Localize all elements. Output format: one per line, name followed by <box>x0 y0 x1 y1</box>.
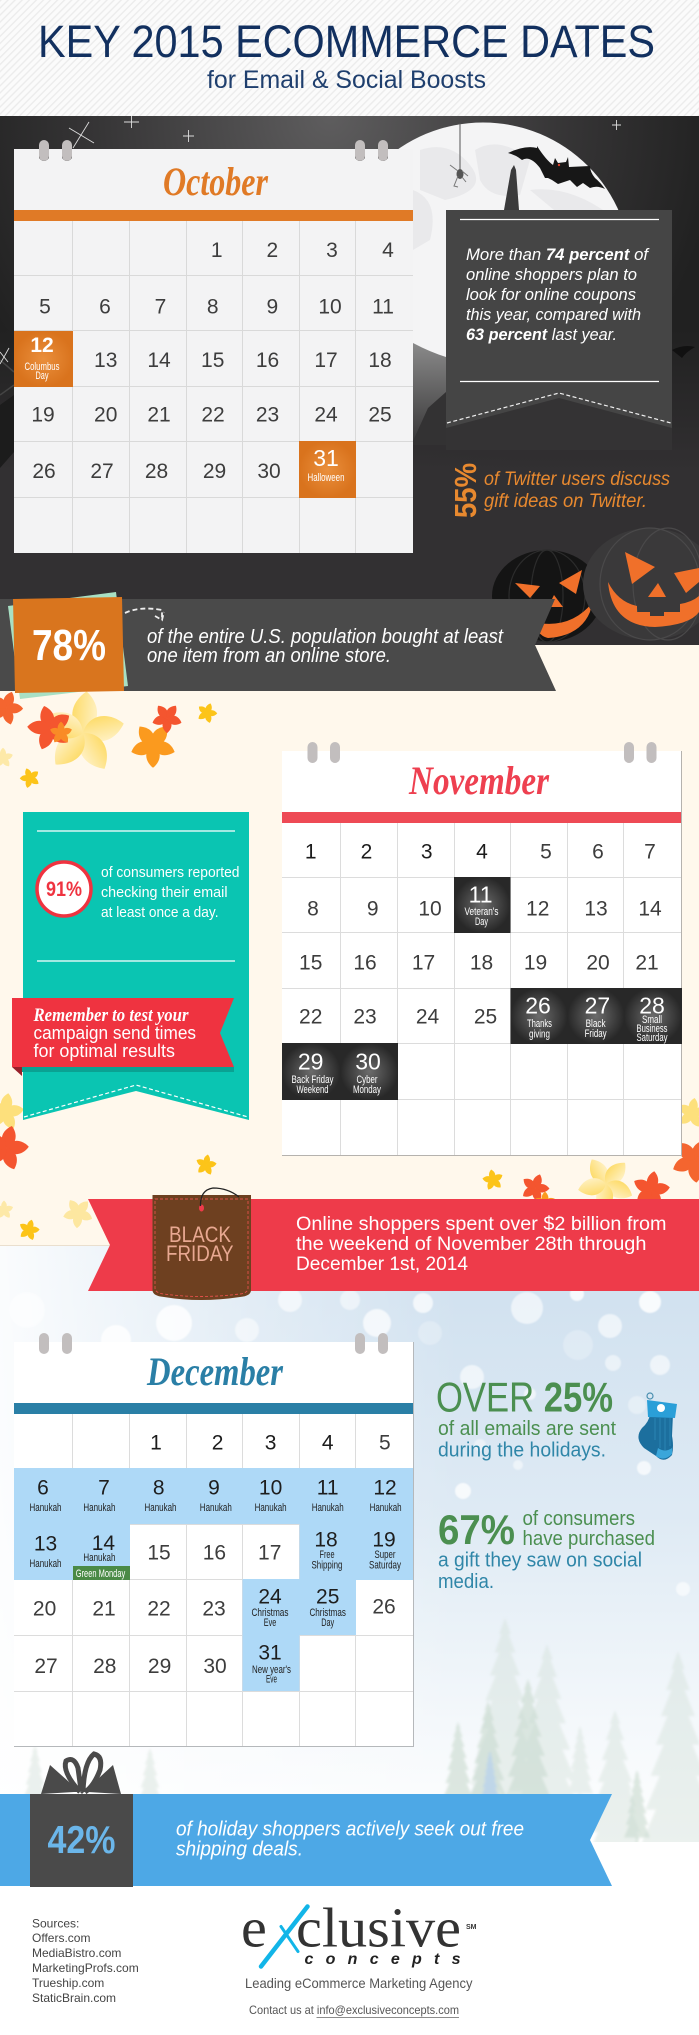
binder rings <box>39 140 388 161</box>
stat: 67% gift on social media: media. <box>438 1571 494 1593</box>
dates: 18 <box>470 952 493 974</box>
dates: 3 <box>265 1432 276 1454</box>
holiday labels: 24 <box>258 1586 282 1608</box>
logo: Exclusive Concepts: c o n c e p t s <box>304 1951 461 1968</box>
spider <box>450 123 468 187</box>
highlight: Black Friday: 27 <box>585 992 610 1018</box>
highlight: Halloween: Halloween <box>308 472 344 484</box>
November background <box>0 645 699 1245</box>
stat: 67% gift on social media: 67% <box>438 1506 515 1553</box>
holiday labels: 6 <box>37 1476 49 1500</box>
dates: 9 <box>267 296 278 318</box>
highlight: Green Monday <box>73 1566 130 1580</box>
highlight: Veteran's Day: 11 <box>469 882 493 908</box>
holiday labels: 7 <box>98 1476 110 1500</box>
small pumpkin <box>492 550 602 642</box>
icon: gift box <box>30 1754 133 1887</box>
header band <box>0 0 699 116</box>
holiday labels: Hanukah <box>30 1558 62 1570</box>
dates: 21 <box>635 952 659 974</box>
holiday labels: Shipping <box>312 1560 342 1572</box>
dates: 21 <box>92 1598 116 1620</box>
dates: 27 <box>90 460 114 483</box>
dates: 17 <box>412 952 435 974</box>
highlight: Thanksgiving: giving <box>529 1028 550 1040</box>
calendar: October <box>14 140 413 553</box>
bat <box>508 146 605 189</box>
trees <box>25 1622 699 1842</box>
ribbon: reminder: campaign send times <box>34 1023 196 1043</box>
highlight: Veteran's Day: Day <box>475 916 488 928</box>
banner: Black Friday: Online shoppers spent over $2 billion from <box>296 1213 666 1235</box>
October night background <box>0 116 699 646</box>
banner: Black Friday <box>88 1188 699 1300</box>
stat: over 25% of emails <box>436 1374 616 1462</box>
logo: Exclusive Concepts: exclusive <box>241 1898 461 1960</box>
highlight: Back Friday Weekend: Weekend <box>296 1084 328 1096</box>
sources: StaticBrain.com <box>32 1991 116 2005</box>
dates: 19 <box>524 952 547 974</box>
highlight: Halloween: 31 <box>313 445 339 471</box>
stat: over 25% of emails: during the holidays. <box>438 1440 606 1462</box>
holiday labels: Hanukah <box>83 1502 115 1514</box>
highlight: Thanksgiving <box>510 988 568 1044</box>
dates: 21 <box>147 404 171 426</box>
holiday labels: 25 <box>316 1586 339 1608</box>
callout: coupons: More than 74 percent of <box>466 245 650 264</box>
highlight: Small Business Saturday: 28 <box>639 992 665 1018</box>
sticky note: 78% <box>32 621 106 670</box>
month name: November <box>408 758 549 803</box>
dates: 10 <box>418 898 442 920</box>
highlight: Small Business Saturday: Saturday <box>636 1032 668 1044</box>
holiday labels: Christmas <box>309 1607 346 1619</box>
sources: Trueship.com <box>32 1976 104 1990</box>
foreground hill <box>413 343 672 450</box>
dates: 16 <box>203 1542 226 1564</box>
dates: 1 <box>150 1432 162 1454</box>
banner: Black Friday: the weekend of November 28th through <box>296 1233 646 1255</box>
callout: coupons <box>446 210 672 428</box>
dates: 15 <box>201 349 224 372</box>
highlight: Veteran's Day: Veteran's <box>464 906 499 918</box>
dates: 16 <box>353 952 377 974</box>
dates: 30 <box>257 460 281 483</box>
banner: 42% <box>0 1754 612 1887</box>
holiday labels: Day <box>321 1617 335 1629</box>
dates: 26 <box>372 1596 396 1618</box>
dates: 8 <box>207 296 219 318</box>
calendar: November <box>282 742 682 1156</box>
dates <box>33 1432 396 1678</box>
snow bokeh <box>9 1287 690 1596</box>
stat: 67% gift on social media: a gift they saw on social <box>438 1550 642 1572</box>
banner: 42%: of holiday shoppers actively seek out free <box>176 1818 524 1840</box>
dates: 30 <box>203 1655 227 1678</box>
December background <box>0 1245 699 1880</box>
holiday labels: New year's <box>252 1664 291 1676</box>
stat: over 25% of emails: OVER 25% <box>436 1374 613 1420</box>
holiday labels: Hanukah <box>144 1502 176 1514</box>
highlight: Black Friday <box>568 988 624 1044</box>
highlight: Thanksgiving: 26 <box>525 992 551 1018</box>
stars <box>0 116 621 364</box>
dates: 4 <box>382 239 394 262</box>
ribbon: reminder: for optimal results <box>34 1041 175 1061</box>
moon with bat and steeple <box>334 122 632 420</box>
dates: 28 <box>145 460 168 483</box>
stat: 55% on Twitter <box>448 463 670 518</box>
highlight: Cyber Monday: 30 <box>355 1048 381 1074</box>
icon: gift box: 42% <box>48 1819 116 1862</box>
dates: 29 <box>148 1655 171 1678</box>
holiday labels: 12 <box>373 1476 397 1500</box>
holiday labels: 18 <box>314 1528 338 1552</box>
holiday labels: Hanukah <box>200 1502 232 1514</box>
tag <box>152 1188 251 1300</box>
tagline: Leading eCommerce Marketing Agency <box>245 1975 472 1991</box>
steeple <box>504 165 519 210</box>
holiday labels: 31 <box>258 1642 282 1664</box>
sticky note <box>8 592 128 699</box>
highlight: Back Friday Weekend: Back Friday <box>292 1074 334 1086</box>
tag: FRIDAY <box>166 1241 234 1266</box>
badge: 91% <box>37 862 91 916</box>
dates: 1 <box>211 239 223 262</box>
autumn leaves <box>0 686 699 1243</box>
dates: 2 <box>267 239 278 262</box>
sources <box>32 1916 139 2005</box>
banner: 78% <box>0 592 556 699</box>
holiday labels: 10 <box>259 1476 282 1500</box>
dates: 8 <box>307 898 319 920</box>
holiday labels: Christmas <box>252 1607 289 1619</box>
dates: 6 <box>99 296 111 318</box>
sources: Offers.com <box>32 1931 90 1945</box>
holiday labels: 13 <box>34 1532 57 1556</box>
stat: 67% gift on social media: have purchased <box>522 1528 655 1550</box>
arrow <box>125 609 164 620</box>
month name: December <box>146 1349 283 1394</box>
month name: October <box>163 159 268 204</box>
dates: 5 <box>39 296 51 318</box>
dates <box>31 239 394 483</box>
subtitle: for Email & Social Boosts <box>207 66 486 94</box>
highlight: Columbus Day: Day <box>36 370 49 382</box>
icon: stocking <box>638 1393 677 1460</box>
banner: Black Friday: December 1st, 2014 <box>296 1253 468 1275</box>
callout: coupons: 63 percent last year. <box>466 325 617 344</box>
dates: 24 <box>416 1006 439 1028</box>
dates: 16 <box>256 349 279 372</box>
dates: 14 <box>638 898 662 920</box>
stat: 67% gift on social media: of consumers <box>522 1508 635 1530</box>
panel: email stat: at least once a day. <box>101 904 218 921</box>
highlighted holiday cells <box>14 1468 413 1691</box>
banner: 78%: one item from an online store. <box>147 645 391 667</box>
highlight: Small Business Saturday: Small <box>642 1014 662 1026</box>
holiday labels: Hanukah <box>312 1502 344 1514</box>
logo: Exclusive Concepts: SM <box>466 1924 477 1931</box>
dates: 22 <box>299 1006 322 1028</box>
holiday labels: Hanukah <box>370 1502 402 1514</box>
ribbon: reminder: Remember to test your <box>33 1005 189 1026</box>
highlight: Black Friday: Friday <box>585 1028 607 1040</box>
highlight: Halloween <box>299 441 356 498</box>
dates: 23 <box>256 404 279 426</box>
highlight: Small Business Saturday: Business <box>636 1023 668 1035</box>
sources: MediaBistro.com <box>32 1946 121 1960</box>
dates: 26 <box>32 460 56 483</box>
dates: 11 <box>372 296 394 318</box>
tag: BLACK <box>169 1222 231 1247</box>
stat: 55% on Twitter: of Twitter users discuss <box>484 469 670 490</box>
dates: 17 <box>258 1542 281 1564</box>
dates: 22 <box>147 1598 171 1620</box>
dates: 25 <box>368 404 392 426</box>
dates: 6 <box>592 840 604 864</box>
calendar: December <box>14 1333 414 1746</box>
dates: 1 <box>305 840 317 864</box>
badge: 91%: 91% <box>46 878 82 901</box>
holiday labels: Saturday <box>369 1560 401 1572</box>
highlight: Columbus Day: 12 <box>30 334 54 357</box>
stat: 55% on Twitter: 55% <box>448 463 483 518</box>
dates <box>299 840 662 1028</box>
dates: 29 <box>203 460 226 483</box>
ribbon: reminder <box>12 998 234 1076</box>
callout: coupons: this year, compared with <box>466 305 641 324</box>
stat: over 25% of emails: of all emails are sent <box>438 1418 616 1440</box>
holiday labels: 19 <box>372 1528 396 1552</box>
dates: 12 <box>526 898 549 920</box>
holiday labels: Hanukah <box>30 1502 62 1514</box>
banner: 78%: of the entire U.S. population bought at least <box>147 626 504 648</box>
highlight: Cyber Monday <box>340 1043 398 1100</box>
holiday labels: Eve <box>266 1674 277 1686</box>
banner: 42%: shipping deals. <box>176 1838 303 1860</box>
holiday labels: 14 <box>92 1532 115 1555</box>
dates: 4 <box>322 1432 334 1454</box>
dates: 27 <box>34 1655 58 1678</box>
callout: coupons: look for online coupons <box>466 285 636 304</box>
dates: 17 <box>314 349 338 372</box>
highlight: Back Friday Weekend: 29 <box>298 1048 323 1074</box>
dates: 20 <box>94 404 117 426</box>
dates: 23 <box>353 1006 377 1028</box>
dates: 13 <box>94 349 117 372</box>
dates: 7 <box>155 296 166 318</box>
binder rings <box>39 1333 388 1354</box>
holiday labels: 11 <box>317 1476 339 1500</box>
sources: MarketingProfs.com <box>32 1961 139 1975</box>
holiday labels: Free <box>320 1549 334 1561</box>
dates: 20 <box>586 952 610 974</box>
dates: 5 <box>379 1432 391 1454</box>
dates: 22 <box>201 404 225 426</box>
holiday labels <box>30 1476 402 1686</box>
dates: 7 <box>644 840 656 864</box>
stat: 67% gift on social media <box>438 1506 655 1593</box>
dates: 15 <box>147 1542 171 1564</box>
holiday labels: 8 <box>153 1476 165 1500</box>
dates: 19 <box>31 404 55 426</box>
highlight: Columbus Day <box>14 331 73 387</box>
dates: 24 <box>314 404 338 426</box>
highlight: Black Friday: Black <box>586 1018 606 1030</box>
panel: email stat: checking their email <box>101 884 228 901</box>
highlight: Cyber Monday: Monday <box>353 1084 381 1096</box>
dates: 15 <box>299 952 322 974</box>
highlight: Cyber Monday: Cyber <box>356 1074 378 1086</box>
dates: 25 <box>474 1006 497 1028</box>
holiday labels: Super <box>374 1549 396 1561</box>
dates: 28 <box>93 1655 116 1678</box>
panel: email stat <box>23 812 249 1120</box>
dates: 3 <box>326 239 338 262</box>
dates: 3 <box>421 840 433 864</box>
binder rings <box>308 742 656 763</box>
holiday labels: 9 <box>208 1476 220 1500</box>
highlight: Back Friday Weekend <box>282 1043 340 1100</box>
sources: Sources: <box>32 1916 79 1930</box>
dates: 23 <box>202 1598 226 1620</box>
contact line: Contact us at info@exclusiveconcepts.com <box>249 2003 459 2017</box>
holiday labels: Eve <box>264 1617 276 1629</box>
dates: 2 <box>212 1432 223 1454</box>
highlight: Small Business Saturday <box>624 988 682 1044</box>
dates: 18 <box>368 349 392 372</box>
dates: 14 <box>147 349 171 372</box>
title: KEY 2015 ECOMMERCE DATES <box>38 16 655 67</box>
holiday labels: Hanukah <box>83 1552 115 1564</box>
highlight: Thanksgiving: Thanks <box>527 1018 552 1030</box>
callout: coupons: online shoppers plan to <box>466 265 637 284</box>
dates: 9 <box>367 898 379 920</box>
panel: email stat: of consumers reported <box>101 864 240 881</box>
dates: 20 <box>33 1598 56 1620</box>
large pumpkin <box>583 528 699 640</box>
stat: 55% on Twitter: gift ideas on Twitter. <box>484 491 647 512</box>
highlight: Green Monday: Green Monday <box>76 1568 126 1580</box>
holiday labels: Hanukah <box>255 1502 287 1514</box>
highlight: Veteran's Day <box>454 877 510 933</box>
dates: 2 <box>361 840 372 864</box>
dates: 4 <box>476 840 488 864</box>
dates: 5 <box>540 840 552 864</box>
highlight: Columbus Day: Columbus <box>24 361 60 373</box>
pumpkins <box>492 528 699 642</box>
dates: 13 <box>584 898 608 920</box>
dates: 10 <box>318 296 342 318</box>
